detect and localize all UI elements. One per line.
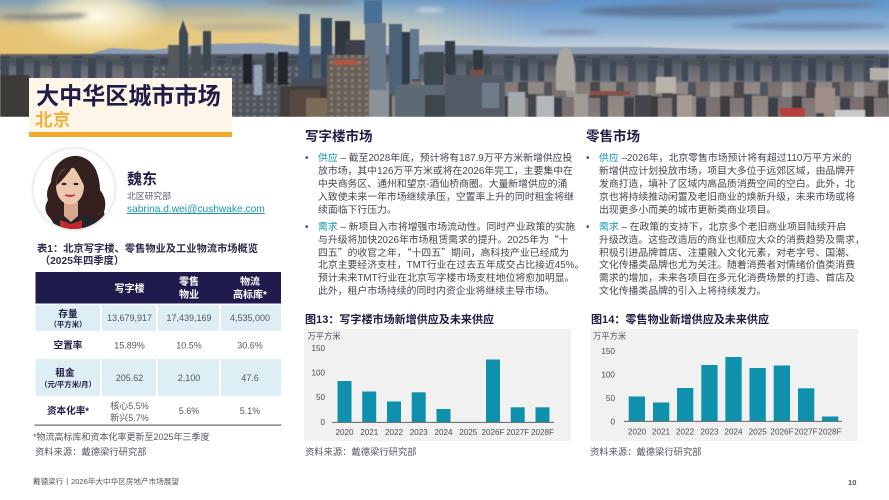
- text: 续面临下行压力。: [318, 205, 397, 216]
- retail market column: [586, 129, 865, 297]
- office heading: 写字楼市场: [305, 129, 372, 144]
- author name: 魏东: [127, 171, 157, 188]
- market overview table: 租金: [55, 367, 75, 379]
- chart: retail new supply: 150: [601, 347, 615, 356]
- table source: 资料来源：戴德梁行研究部: [35, 447, 147, 457]
- chart: retail new supply: 2027F: [794, 428, 818, 436]
- market overview table: 存量: [58, 308, 78, 320]
- text: 出现更多小而美的城市更新类商业项目。: [599, 205, 776, 216]
- chart: office new supply: 150: [311, 344, 325, 353]
- text: 入致使未来一年市场继续承压，空置率上升的同时租金将继: [318, 192, 574, 203]
- chart: office new supply: 2025: [459, 428, 478, 437]
- text: 需求的增加，未来各项目在多元化消费场景的打造、首店及: [599, 273, 855, 284]
- text: 预计未来TMT行业在北京写字楼市场支柱地位将愈加明显。: [318, 273, 574, 284]
- right side buildings: [445, 41, 455, 74]
- orange accent bar: [29, 132, 232, 137]
- market overview table: （平方米）: [50, 320, 86, 329]
- title: 大中华区城市市场: 大中华区城市市场: [36, 83, 221, 109]
- text: 文化传播类品牌的引入上将持续发力。: [599, 286, 766, 297]
- market overview table: 零售: [179, 275, 199, 288]
- chart: office new supply: 2027F: [506, 428, 529, 437]
- chart: office new supply: 2023: [410, 428, 428, 437]
- retail supply bullet: [586, 152, 855, 216]
- chart: retail new supply: 50: [606, 394, 615, 403]
- table footnote: *物流高标库和资本化率更新至2025年三季度: [33, 432, 210, 442]
- chart: office new supply: 2020: [335, 428, 354, 437]
- market overview table: 47.6: [241, 373, 259, 383]
- text: 发商打造，填补了区域内高品质消费空间的空白。此外，北: [599, 179, 855, 190]
- market overview table: 10.5%: [176, 340, 202, 350]
- retail demand bullet: •: [586, 222, 589, 233]
- retail supply bullet: •: [586, 153, 589, 164]
- figure 13 source: 资料来源：戴德梁行研究部: [305, 447, 417, 457]
- text: 供应 – 截至2028年底，预计将有187.9万平方米新增供应投: [318, 153, 572, 164]
- author department: 北区研究部: [127, 191, 171, 201]
- market overview table: 写字楼: [114, 282, 144, 295]
- market overview table: 物流: [240, 275, 260, 288]
- chart: retail new supply: 0: [610, 418, 615, 426]
- text: 中央商务区、通州和望京-酒仙桥商圈。大量新增供应的涌: [318, 179, 567, 190]
- chart: retail new supply: 2021: [652, 428, 671, 436]
- market overview table: 高标库*: [233, 288, 267, 301]
- text: 北京主要经济支柱，TMT行业在过去五年成交占比接近45%。: [318, 260, 584, 271]
- chart: retail new supply: 2023: [700, 428, 719, 436]
- portrait avatar: [32, 146, 116, 232]
- text: 升级改造。这些改造后的商业也顺应大众的消费趋势及需求，: [599, 235, 865, 246]
- chart: office new supply: [304, 329, 571, 441]
- chart: office new supply: 2026F: [482, 428, 505, 437]
- market overview table: 5.1%: [240, 406, 260, 416]
- office supply bullet: •: [305, 153, 308, 164]
- market overview table: 205.62: [116, 373, 143, 383]
- market overview table: 资本化率*: [47, 405, 89, 417]
- chart: office new supply: 100: [311, 368, 325, 378]
- table title: （2025年四季度）: [40, 256, 124, 267]
- chart: retail new supply: 100: [601, 370, 615, 380]
- chart: office new supply: 50: [316, 393, 325, 402]
- chart: retail new supply: 2022: [676, 428, 695, 436]
- header photo: Beijing skyline: [0, 0, 889, 117]
- chart: retail new supply: [590, 329, 858, 441]
- text: 放市场，其中126万平方米或将在2026年完工，主要集中在: [318, 166, 573, 177]
- chart: office new supply: 0: [320, 418, 325, 427]
- text: 京也将持续推动闲置及老旧商业的焕新升级，未来市场或将: [599, 192, 855, 203]
- market overview table: 空置率: [54, 340, 83, 352]
- chart: office new supply: 2024: [434, 428, 453, 437]
- office demand bullet: [305, 222, 584, 297]
- footer text: 戴德梁行丨2026年大中华区房地产市场展望: [33, 477, 179, 486]
- market overview table: 物业: [179, 288, 199, 301]
- chart: office new supply: 万平方米: [308, 331, 341, 341]
- market overview table: 30.6%: [237, 340, 263, 350]
- table title: 表1：北京写字楼、零售物业及工业物流市场概览: [37, 244, 258, 254]
- market overview table: [34, 272, 282, 426]
- chart: retail new supply: 2028F: [818, 428, 842, 436]
- market overview table: 15.89%: [114, 340, 145, 350]
- market overview table: 核心5.5%: [110, 400, 149, 411]
- text: 积极引进品牌首店、注重融入文化元素，对老字号、国潮、: [599, 248, 855, 259]
- figure 13 title: 图13：写字楼市场新增供应及未来供应: [305, 314, 494, 326]
- office market column: [305, 129, 584, 297]
- page number: 10: [848, 478, 856, 487]
- market overview table: 2,100: [178, 373, 200, 383]
- text: 新增供应计划投放市场，项目大多位于远郊区域，由品牌开: [599, 166, 855, 177]
- office supply bullet: [305, 152, 574, 216]
- text: 供应 –2026年，北京零售市场预计将有超过110万平方米的: [599, 153, 852, 164]
- text: 文化传播类品牌也尤为关注。随着消费者对情绪价值类消费: [599, 260, 855, 271]
- market overview table: 4,535,000: [230, 313, 270, 323]
- chart: retail new supply: 2025: [749, 428, 767, 436]
- figure 14 title: 图14：零售物业新增供应及未来供应: [591, 314, 769, 326]
- market overview table: 13,679,917: [107, 313, 152, 323]
- market overview table: （元/平方米/月）: [40, 380, 96, 389]
- CBD towers: [168, 45, 179, 78]
- chart: office new supply: 2021: [360, 428, 379, 437]
- text: 四五”的收官之年，“十四五”期间，高科技产业已经成为: [318, 245, 569, 259]
- market overview table: 5.6%: [179, 406, 199, 416]
- chart: retail new supply: 2020: [628, 428, 647, 436]
- author email: sabrina.d.wei@cushwake.com: [127, 204, 265, 215]
- market overview table: 新兴5.7%: [110, 412, 149, 423]
- title card: [29, 78, 232, 137]
- subtitle: 北京: 北京: [35, 110, 70, 130]
- chart: office new supply: 2022: [385, 428, 403, 437]
- text: 与升级将加快2026年市场租赁需求的提升。2025年为“十: [318, 232, 569, 246]
- chart: retail new supply: 2026F: [770, 428, 794, 436]
- chart: office new supply: 2028F: [531, 428, 554, 437]
- text: 需求 – 新项目入市将增强市场流动性。同时产业政策的实施: [318, 222, 575, 233]
- chart: retail new supply: 万平方米: [593, 331, 627, 341]
- office demand bullet: •: [305, 222, 308, 233]
- market overview table: 17,439,169: [166, 313, 212, 323]
- chart: retail new supply: 2024: [724, 428, 743, 436]
- retail demand bullet: [586, 222, 865, 297]
- retail heading: 零售市场: [586, 129, 640, 144]
- text: 需求 – 在政策的支持下，北京多个老旧商业项目陆续开启: [599, 222, 846, 233]
- text: 此外，租户市场持续的同时内资企业将继续主导市场。: [318, 286, 554, 297]
- table title: [37, 243, 258, 267]
- figure 14 source: 资料来源：戴德梁行研究部: [590, 447, 702, 457]
- left low-rise: [0, 75, 30, 117]
